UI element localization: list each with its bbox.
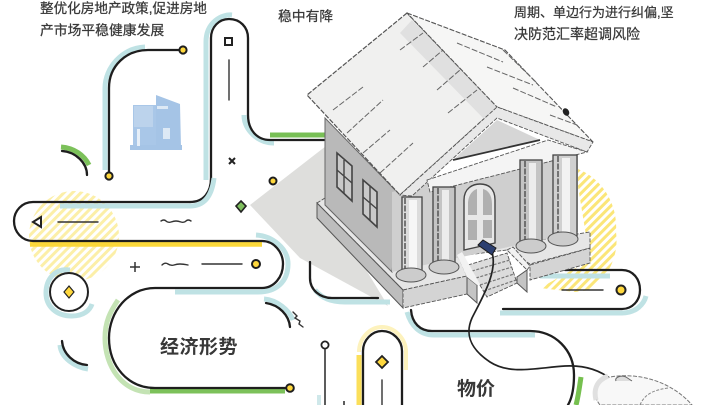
dot — [270, 178, 276, 184]
column 3 — [516, 160, 546, 253]
line — [58, 221, 98, 223]
icon: blue house — [130, 95, 182, 150]
squiggle small — [293, 312, 303, 327]
text: housing policy — [40, 0, 207, 38]
illustration: bank building — [307, 13, 593, 308]
pediment — [400, 107, 593, 196]
pin line — [319, 341, 344, 405]
icon: square marker — [225, 38, 232, 45]
arc: lower left — [60, 341, 88, 369]
entablature — [427, 140, 587, 192]
text: housing policy: 整优化房地产政策,促进房地 — [40, 0, 207, 16]
squiggle — [161, 220, 191, 222]
squiggle — [162, 263, 188, 265]
front wall — [392, 145, 578, 272]
side windows — [337, 153, 377, 227]
arc: green — [61, 147, 89, 175]
circle with diamond — [46, 270, 92, 316]
curve with dots: upper left — [105, 46, 187, 180]
arc: middle — [264, 299, 293, 327]
line to mouse — [407, 310, 581, 405]
dot — [252, 260, 260, 268]
main winding line — [14, 178, 294, 392]
vertical line — [228, 60, 230, 100]
lower-left pipe under building — [310, 262, 390, 302]
door — [464, 184, 495, 250]
columns — [396, 155, 578, 282]
text: exchange rate: 决防范汇率超调风险 — [514, 26, 640, 42]
roof seams right — [457, 43, 577, 125]
illustration: computer mouse — [595, 376, 692, 405]
roof shade strip — [400, 20, 497, 119]
icon: diamond green — [236, 201, 246, 212]
text: exchange rate — [514, 5, 674, 42]
right pill — [500, 270, 646, 313]
icon: cross — [229, 158, 235, 164]
column 1 — [396, 197, 426, 282]
line — [202, 263, 242, 265]
column 4 — [548, 155, 578, 246]
plug — [478, 240, 496, 255]
steps — [457, 247, 530, 303]
yellow pill — [359, 327, 406, 405]
base: front — [403, 248, 590, 308]
plinth top surface — [317, 198, 590, 290]
icon: triangle — [33, 217, 41, 227]
heading: prices: 物价 — [457, 378, 495, 400]
roof: right plane — [407, 13, 593, 142]
roof seams left — [333, 33, 477, 173]
roof: left plane — [307, 13, 497, 195]
base: left side — [317, 203, 403, 308]
building shadow — [250, 146, 388, 306]
roof vent — [561, 107, 571, 117]
column 2 — [429, 187, 459, 274]
side wall — [325, 118, 400, 272]
hatched circle: right — [540, 168, 617, 292]
hatched circle: left — [29, 191, 119, 281]
text: housing policy: 产市场平稳健康发展 — [40, 22, 164, 38]
text: exchange rate: 周期、单边行为进行纠偏,坚 — [514, 5, 674, 20]
text: steady decline: 稳中有降 — [278, 9, 333, 24]
tall pill line with green end — [190, 15, 325, 202]
power cord — [469, 252, 612, 380]
heading: economy: 经济形势 — [160, 335, 238, 358]
plus — [130, 262, 140, 272]
